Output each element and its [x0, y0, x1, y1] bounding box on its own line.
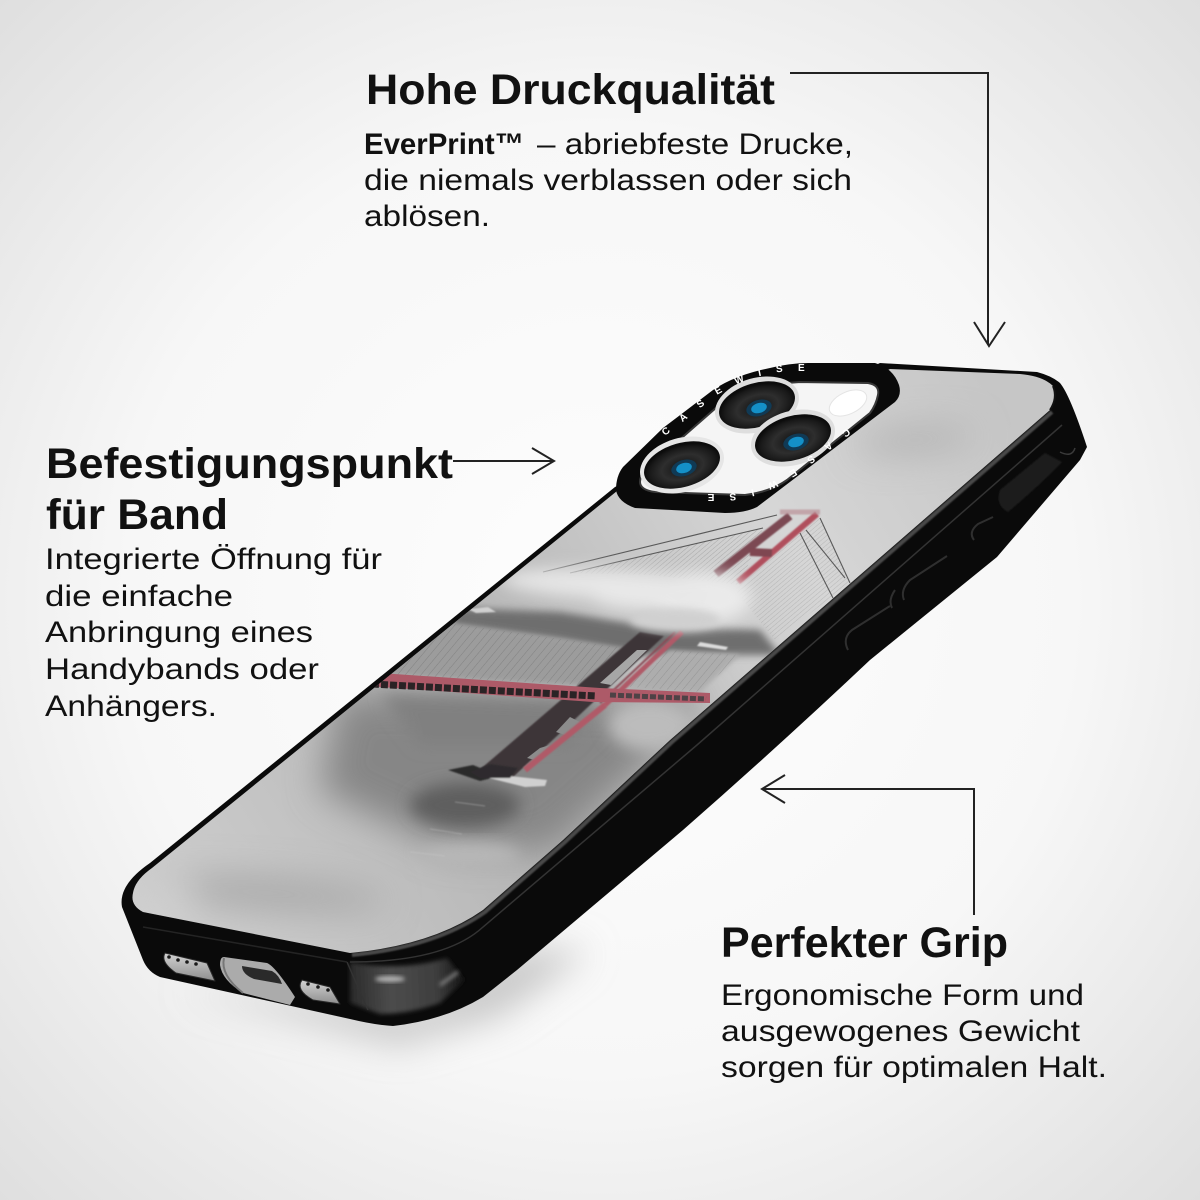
- body text: ausgewogenes Gewicht: [721, 1015, 1081, 1048]
- print: distant shore: [450, 607, 780, 655]
- right speaker grille: [300, 980, 340, 1004]
- case corner gloss: [347, 958, 465, 1014]
- print: soft mist tones: [145, 423, 976, 915]
- case side panel shine: [999, 448, 1075, 512]
- print: lower bridge tower: [477, 608, 720, 778]
- tower top fog fade: [630, 608, 720, 632]
- print: roadway hatch under shore: [380, 623, 740, 692]
- back panel edge: [1050, 386, 1055, 410]
- arrow: grip: [762, 775, 974, 915]
- callout: strap attachment: [45, 440, 453, 723]
- print: water: [320, 695, 710, 867]
- body text: [721, 979, 1107, 1084]
- body text: [45, 543, 382, 723]
- heading: Befestigungspunkt: [46, 440, 453, 488]
- body text: Handybands oder: [45, 653, 319, 686]
- phone shadow: [180, 950, 590, 1045]
- print: tower base: [448, 764, 547, 787]
- camera module: [616, 363, 900, 513]
- charging port: [220, 957, 295, 1005]
- body text: EverPrint™: [364, 128, 524, 161]
- camera bumper ring: [616, 363, 900, 513]
- print: water glints: [430, 801, 485, 834]
- print: suspension cables and hatch: [543, 515, 850, 640]
- case body: [122, 363, 1087, 1026]
- body text: Anbringung eines: [45, 616, 313, 649]
- callout: print quality: [364, 66, 853, 233]
- heading: Hohe Druckqualität: [366, 66, 775, 114]
- tower windows: [600, 650, 647, 685]
- arrow: print quality: [790, 73, 1005, 346]
- case rim groove: [350, 425, 1062, 962]
- tower red stripes: [525, 632, 682, 770]
- body text: sorgen für optimalen Halt.: [721, 1051, 1107, 1084]
- body text: die niemals verblassen oder sich: [364, 164, 852, 197]
- bottom ports: [164, 953, 340, 1005]
- callout: strap attachment: für Band: [46, 491, 228, 539]
- bumper branding top: CASEWISE: [662, 364, 804, 434]
- left speaker grille: [164, 953, 215, 981]
- body text: Anhängers.: [45, 690, 217, 723]
- lens right: [744, 400, 842, 476]
- printed back panel: [132, 369, 1054, 953]
- callout: grip: [721, 919, 1107, 1084]
- lens left: [633, 427, 731, 503]
- phone case: [122, 363, 1087, 1026]
- print: road deck: [367, 673, 710, 703]
- print: upper bridge tower: [716, 512, 820, 582]
- print: fog cloud: [499, 564, 752, 624]
- body text: [364, 128, 853, 233]
- lens top: [708, 367, 806, 443]
- arrow: strap attachment: [453, 448, 554, 474]
- body text: Ergonomische Form und: [721, 979, 1084, 1012]
- body text: – abriebfeste Drucke,: [537, 128, 853, 161]
- heading: Perfekter Grip: [721, 919, 1008, 967]
- body text: ablösen.: [364, 200, 490, 233]
- body text: Integrierte Öffnung für: [45, 543, 382, 576]
- body text: die einfache: [45, 580, 233, 613]
- tower dark leg: [477, 632, 664, 778]
- bumper branding bottom: CASEWISE: [708, 430, 850, 501]
- case rim highlight: [352, 412, 1052, 955]
- glass flash: [825, 385, 871, 421]
- side buttons: [846, 517, 993, 650]
- camera glass: [640, 382, 878, 495]
- bottom rim line: [143, 927, 347, 962]
